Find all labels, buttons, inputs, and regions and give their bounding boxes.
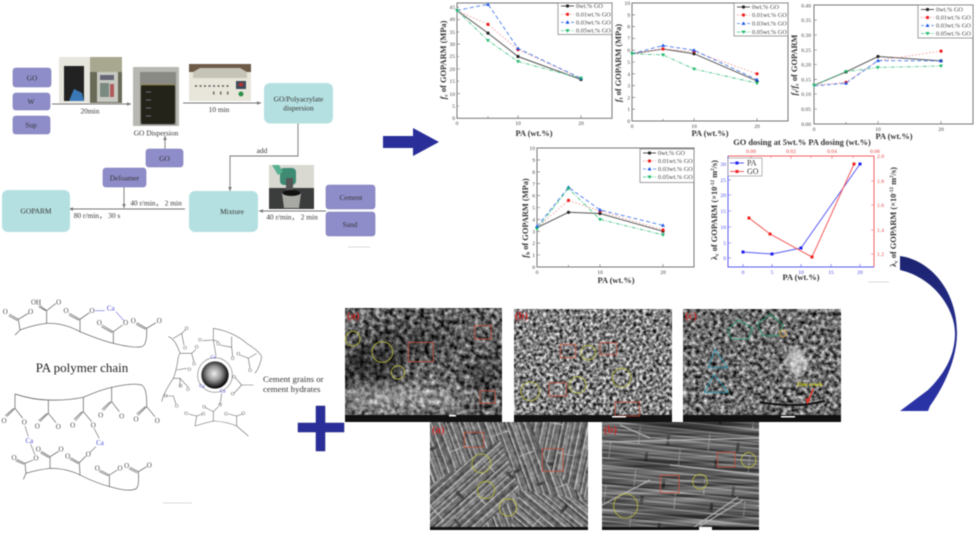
chart: flexural strength ft: 10 — [691, 124, 697, 130]
chart: chloride diffusion vs PA and GO: 0.04 — [827, 149, 837, 155]
box: Mixture — [189, 191, 258, 232]
bottom chains linked by Ca: O — [70, 421, 75, 429]
chart: compressive strength fc: 5 — [452, 104, 455, 110]
arrow: 10 min — [183, 103, 261, 114]
chart: strength ratio ft/fc: 0 — [813, 127, 816, 133]
diagram: polymer adsorbed on cement grain: O — [231, 393, 235, 398]
chart: bond strength fb: 5 — [532, 206, 535, 212]
chart: flexural strength ft — [614, 1, 788, 138]
chart: compressive strength fc — [439, 2, 612, 138]
chart: chloride diffusion vs PA and GO: 20 — [857, 270, 863, 276]
input box: Sand — [326, 212, 375, 236]
diagram: polymer adsorbed on cement grain: O — [179, 385, 183, 390]
chart: compressive strength fc: 30 — [449, 42, 455, 48]
chart: flexural strength ft: 20 — [754, 124, 760, 130]
chart: bond strength fb: 9 — [532, 158, 535, 164]
chart: compressive strength fc: 25 — [449, 54, 455, 60]
chart: chloride diffusion vs PA and GO: GO — [747, 167, 759, 176]
box: Defoamer with arrow — [103, 168, 146, 208]
chart: chloride diffusion vs PA and GO: 20 — [720, 193, 726, 199]
diagram: PA polymer chains: O — [56, 298, 61, 306]
diagram: polymer adsorbed on cement grain: Ca — [211, 356, 217, 361]
chart: flexural strength ft: 7 — [627, 36, 630, 42]
chart: compressive strength fc: 15 — [449, 79, 455, 85]
chart: bond strength fb: 2 — [532, 241, 535, 247]
bottom chains linked by Ca: O — [22, 419, 27, 427]
chart: chloride diffusion vs PA and GO: 10 — [720, 225, 726, 231]
chart: chloride diffusion vs PA and GO: of GOPARM (×10 — [710, 187, 719, 253]
chart: compressive strength fc: of GOPARM (MPa) — [439, 20, 448, 94]
arrow: mixture to GOPARM — [69, 198, 185, 220]
label: cement grains or cement hydrates: Cement grains or — [263, 374, 324, 384]
diagram: PA polymer chains: O — [89, 307, 95, 315]
chart: chloride diffusion vs PA and GO: 1.8 — [877, 179, 884, 185]
SEM image (a) top: (a) — [347, 311, 360, 322]
box: GO/Polyacrylate dispersion: GO/Polyacrylate — [274, 94, 324, 104]
chart: compressive strength fc: 20 — [578, 121, 584, 127]
chart: bond strength fb: 0 — [536, 270, 539, 276]
chart: chloride diffusion vs PA and GO: 10 — [798, 270, 804, 276]
bottom chains linked by Ca: O — [11, 454, 17, 462]
arrow: mixture to GOPARM: 40 r/min， 2 min — [130, 198, 182, 208]
chart: strength ratio ft/fc: 0.35 — [801, 18, 811, 24]
chart: bond strength fb: 0.03wt.% GO — [658, 166, 693, 173]
chart: bond strength fb: 0.05wt.% GO — [658, 174, 693, 181]
SEM image (c) top: Fine crack — [797, 382, 823, 388]
label: cement grains or cement hydrates — [263, 374, 324, 394]
arrow: 10 min: 10 min — [209, 105, 230, 114]
chart: compressive strength fc: 0.03wt.% GO — [576, 19, 611, 26]
input box: W: W — [28, 97, 35, 106]
chart: flexural strength ft: 3 — [627, 84, 630, 90]
diagram: PA polymer chains: O — [63, 307, 69, 315]
box: GOPARM: GOPARM — [21, 206, 52, 216]
SEM image (a) top — [330, 308, 502, 422]
diagram: polymer adsorbed on cement grain: O — [202, 405, 206, 410]
label: cement grains or cement hydrates: cement hydrates — [263, 384, 321, 394]
arrow: 40 r/min 2 min into mixture: 40 r/min， 2 min — [266, 212, 318, 222]
diagram: PA polymer chains: O — [157, 317, 162, 325]
chart: flexural strength ft: 0.01wt.% GO — [752, 12, 787, 19]
bottom chains linked by Ca: O — [35, 422, 40, 430]
arrow: mixture to GOPARM: 80 r/min， 30 s — [74, 211, 120, 220]
bottom chains linked by Ca: Ca — [25, 437, 33, 445]
chart: chloride diffusion vs PA and GO: 5 — [771, 270, 774, 276]
input box: Cement: Cement — [340, 193, 363, 202]
diagram: polymer adsorbed on cement grain: O — [218, 404, 222, 409]
chart: strength ratio ft/fc: 0.15 — [801, 78, 811, 84]
chart: chloride diffusion vs PA and GO: /s) — [889, 167, 898, 176]
chart: strength ratio ft/fc: f — [790, 84, 799, 88]
chart: chloride diffusion vs PA and GO: 0 — [742, 270, 745, 276]
chart: flexural strength ft: of GOPARM (MPa) — [614, 24, 623, 97]
chart: bond strength fb: 1 — [532, 253, 535, 259]
box: GO with arrow: GO — [159, 154, 170, 163]
arrow: add to mixture — [230, 124, 298, 191]
diagram: polymer adsorbed on cement grain: O — [224, 413, 228, 418]
input box: Sand: Sand — [343, 220, 358, 229]
chart: chloride diffusion vs PA and GO: PA (wt.%) — [782, 273, 820, 282]
diagram: polymer adsorbed on cement grain: O — [237, 353, 241, 358]
diagram: polymer adsorbed on cement grain: O — [183, 346, 187, 351]
diagram: polymer adsorbed on cement grain: Ca — [220, 389, 226, 394]
chart: flexural strength ft: t — [618, 97, 624, 99]
chart: flexural strength ft: 0.03wt.% GO — [752, 20, 787, 28]
input box: GO — [13, 68, 51, 87]
chart: chloride diffusion vs PA and GO: 0.06 — [870, 149, 880, 155]
diagram: polymer adsorbed on cement grain: O — [164, 395, 168, 400]
diagram: PA polymer chains: OH — [31, 299, 41, 307]
diagram: polymer adsorbed on cement grain — [162, 327, 262, 436]
chart: compressive strength fc: 0 — [452, 116, 455, 122]
chart: chloride diffusion vs PA and GO: λ — [710, 256, 719, 260]
chart: flexural strength ft: 5 — [627, 60, 630, 66]
chart: chloride diffusion vs PA and GO: -12 — [890, 186, 895, 194]
input box: Sup — [13, 116, 50, 134]
bottom chains linked by Ca: O — [119, 412, 124, 420]
arrow: 20min: 20min — [81, 106, 100, 116]
chart: chloride diffusion vs PA and GO: GO dosing at 5wt.% PA dosing (wt.%) — [733, 138, 871, 147]
bottom chains linked by Ca: O — [95, 465, 100, 473]
chart: strength ratio ft/fc: c — [794, 83, 800, 86]
chart: strength ratio ft/fc: 0.30 — [801, 33, 811, 39]
chart: compressive strength fc: 10 — [449, 92, 455, 98]
diagram: PA polymer chains: O — [97, 319, 102, 327]
diagram: polymer adsorbed on cement grain: O — [185, 327, 189, 332]
chart: chloride diffusion vs PA and GO: 0 — [723, 256, 726, 262]
chart: strength ratio ft/fc: / — [790, 88, 799, 92]
SEM image (a) bottom — [430, 422, 588, 530]
chart: chloride diffusion vs PA and GO: 0.02 — [786, 149, 796, 155]
diagram: polymer adsorbed on cement grain: O — [202, 413, 206, 418]
arrow: flow chart to charts — [383, 128, 439, 156]
chart: bond strength fb: 6 — [532, 194, 535, 200]
bottom chains linked by Ca: O — [1, 417, 7, 425]
chart: chloride diffusion vs PA and GO: 2 — [711, 168, 716, 171]
bottom chains linked by Ca: O — [133, 416, 139, 424]
diagram: polymer adsorbed on cement grain: O — [232, 375, 236, 380]
input box: W — [13, 93, 50, 110]
chart: compressive strength fc: 0.01wt.% GO — [576, 11, 611, 18]
diagram: polymer adsorbed on cement grain: O — [186, 388, 190, 393]
chart: strength ratio ft/fc: 0.00 — [801, 122, 811, 128]
chart: strength ratio ft/fc: 0.05 — [801, 107, 811, 113]
chart: chloride diffusion vs PA and GO: 0.00 — [746, 149, 756, 155]
bottom chains linked by Ca: O — [91, 421, 96, 429]
bottom chains linked by Ca: O — [58, 445, 64, 453]
chart: bond strength fb: 4 — [532, 218, 535, 224]
chart: strength ratio ft/fc: 0.03wt.% GO — [936, 22, 971, 30]
chart: chloride diffusion vs PA and GO: 5 — [723, 241, 726, 247]
diagram: polymer adsorbed on cement grain: O — [198, 339, 202, 344]
chart: flexural strength ft: 0wt.% GO — [752, 4, 779, 11]
SEM image (b) top: (b) — [515, 311, 528, 322]
chart: strength ratio ft/fc: 0.40 — [801, 4, 811, 10]
arrow: 40 r/min 2 min into mixture — [259, 211, 326, 222]
bottom chains linked by Ca: O — [36, 446, 41, 454]
chart: compressive strength fc: f — [439, 95, 448, 99]
chart: flexural strength ft: 10 — [624, 1, 630, 7]
bottom chains linked by Ca: O — [147, 461, 152, 469]
bottom chains linked by Ca: Ca — [96, 439, 104, 447]
chart: chloride diffusion vs PA and GO: PA — [747, 158, 757, 168]
chart: compressive strength fc: 0 — [456, 121, 459, 127]
chart: bond strength fb — [521, 146, 694, 285]
diagram: polymer adsorbed on cement grain: O — [184, 412, 188, 417]
chart: compressive strength fc: 45 — [449, 5, 455, 11]
chart: flexural strength ft: 9 — [627, 13, 630, 19]
chart: strength ratio ft/fc: 0.05wt.% GO — [936, 30, 971, 38]
diagram: PA polymer chains: Ca — [107, 305, 115, 313]
chart: chloride diffusion vs PA and GO: 2.0 — [877, 154, 884, 160]
diagram: PA polymer chains — [1, 298, 162, 490]
chart: bond strength fb: 7 — [532, 182, 535, 188]
chart: chloride diffusion vs PA and GO: 1.2 — [877, 252, 884, 258]
box: Defoamer with arrow: Defoamer — [110, 174, 140, 182]
chart: strength ratio ft/fc: 10 — [875, 127, 881, 133]
input box: GO: GO — [27, 74, 38, 82]
diagram: polymer adsorbed on cement grain: O — [192, 362, 196, 367]
diagram: polymer adsorbed on cement grain: O — [188, 368, 192, 373]
chart: bond strength fb: b — [526, 252, 532, 255]
bottom chains linked by Ca: O — [98, 411, 103, 419]
chart: flexural strength ft: f — [614, 98, 623, 102]
box: Mixture: Mixture — [220, 207, 245, 216]
chart: bond strength fb: f — [521, 254, 530, 258]
SEM image (b) bottom — [602, 422, 759, 530]
SEM image (b) top — [514, 309, 672, 422]
box: GOPARM — [2, 190, 70, 232]
chart: bond strength fb: 0wt.% GO — [658, 150, 685, 157]
chart: chloride diffusion vs PA and GO: λ — [889, 263, 898, 267]
chart: strength ratio ft/fc: 0.01wt.% GO — [936, 14, 971, 22]
chart: flexural strength ft: 0 — [627, 119, 630, 125]
chart: chloride diffusion vs PA and GO: 1.6 — [877, 203, 884, 209]
box: GO/Polyacrylate dispersion — [264, 83, 333, 124]
chart: chloride diffusion vs PA and GO — [710, 138, 900, 282]
chart: compressive strength fc: 40 — [449, 17, 455, 23]
chart: chloride diffusion vs PA and GO: 2 — [890, 175, 895, 178]
SEM image (b) bottom: (b) — [604, 425, 617, 436]
bottom chains linked by Ca: O — [155, 417, 160, 425]
icon: plus sign — [298, 406, 344, 451]
panel: preparation flow chart — [2, 57, 375, 236]
SEM image (a) bottom: (a) — [432, 425, 445, 436]
chart: flexural strength ft: 2 — [627, 96, 630, 102]
chart: chloride diffusion vs PA and GO: -12 — [711, 179, 716, 187]
chart: bond strength fb: 0 — [532, 265, 535, 271]
chart: compressive strength fc: 0.05wt.% GO — [576, 28, 611, 35]
chart: compressive strength fc: 0wt.% GO — [576, 3, 603, 10]
chart: chloride diffusion vs PA and GO: m — [889, 178, 898, 187]
photo: water bath — [189, 64, 251, 101]
chart: flexural strength ft: 0 — [631, 124, 634, 130]
box: GO with arrow — [146, 136, 183, 167]
chart: strength ratio ft/fc — [790, 4, 973, 141]
bottom chains linked by Ca: O — [117, 465, 123, 473]
label: PA polymer chain: PA polymer chain — [36, 360, 129, 375]
bottom chains linked by Ca: O — [33, 455, 39, 463]
diagram: PA polymer chains: O — [123, 319, 128, 327]
diagram: polymer adsorbed on cement grain: O — [248, 369, 252, 374]
chart: chloride diffusion vs PA and GO: of GOPARM (×10 — [889, 194, 898, 260]
diagram: polymer adsorbed on cement grain: O — [242, 412, 246, 417]
chart: bond strength fb: 8 — [532, 170, 535, 176]
chart: bond strength fb: 3 — [532, 230, 535, 236]
diagram: PA polymer chains: O — [131, 317, 136, 325]
chart: strength ratio ft/fc: 20 — [938, 127, 944, 133]
chart: flexural strength ft: 4 — [627, 72, 630, 78]
photo: mortar mixer — [269, 165, 314, 209]
chart: flexural strength ft: 0.05wt.% GO — [752, 29, 787, 36]
chart: flexural strength ft: 6 — [627, 48, 630, 54]
bottom chains linked by Ca: O — [124, 462, 129, 470]
diagram: polymer adsorbed on cement grain: O — [175, 405, 179, 410]
chart: strength ratio ft/fc: f — [790, 91, 799, 95]
chart: strength ratio ft/fc: 0wt.% GO — [936, 6, 963, 14]
chart: chloride diffusion vs PA and GO: c — [714, 253, 720, 256]
bottom chains linked by Ca: O — [65, 452, 70, 460]
chart: chloride diffusion vs PA and GO: 25 — [720, 178, 726, 184]
box: GO/Polyacrylate dispersion: dispersion — [283, 104, 314, 112]
chart: compressive strength fc: 35 — [449, 30, 455, 36]
chart: chloride diffusion vs PA and GO: 15 — [720, 209, 726, 215]
bottom chains linked by Ca: O — [56, 423, 61, 431]
chart: strength ratio ft/fc: 0.10 — [801, 92, 811, 98]
input box: Sup: Sup — [25, 120, 37, 130]
chart: chloride diffusion vs PA and GO: c — [894, 260, 900, 263]
diagram: polymer adsorbed on cement grain: O — [231, 357, 235, 362]
chart: bond strength fb: 10 — [597, 270, 603, 276]
chart: chloride diffusion vs PA and GO: 30 — [720, 162, 726, 168]
chart: chloride diffusion vs PA and GO: /s) — [710, 160, 719, 169]
chart: flexural strength ft: 8 — [627, 24, 630, 30]
diagram: polymer adsorbed on cement grain: O — [195, 346, 199, 351]
chart: strength ratio ft/fc: 0.20 — [801, 62, 811, 68]
label: GO Dispersion: GO Dispersion — [134, 128, 179, 138]
chart: flexural strength ft: 1 — [627, 107, 630, 113]
SEM image (c) top — [683, 309, 841, 422]
diagram: polymer adsorbed on cement grain: Ca — [199, 385, 206, 390]
diagram: polymer adsorbed on cement grain: O — [217, 343, 221, 348]
chart: compressive strength fc: c — [444, 94, 450, 97]
chart: compressive strength fc: PA (wt.%) — [515, 129, 553, 138]
top chain with Ca bridge — [9, 303, 156, 347]
chart: strength ratio ft/fc: of GOPARM — [790, 34, 799, 83]
bottom chains linked by Ca — [1, 384, 160, 490]
chart: flexural strength ft: PA (wt.%) — [691, 129, 729, 138]
chart: bond strength fb: of GOPARM (MPa) — [521, 178, 530, 252]
SEM image (c) top: (c) — [685, 311, 697, 322]
diagram: PA polymer chains: O — [28, 308, 33, 316]
chart: chloride diffusion vs PA and GO: 15 — [828, 270, 834, 276]
bottom chains linked by Ca: O — [86, 450, 91, 458]
diagram: PA polymer chains: O — [3, 308, 8, 316]
chart: compressive strength fc: 20 — [449, 67, 455, 73]
input box: Cement — [326, 185, 375, 209]
photo: beaker of GO dispersion — [133, 67, 179, 126]
chart: bond strength fb: 20 — [660, 270, 666, 276]
chart: strength ratio ft/fc: 0.25 — [801, 48, 811, 54]
arrow: 20min — [52, 104, 131, 116]
chart: chloride diffusion vs PA and GO: 1.4 — [877, 228, 884, 234]
photo: ultrasonic instrument — [59, 57, 122, 103]
chart: strength ratio ft/fc: t — [794, 91, 800, 93]
chart: bond strength fb: PA (wt.%) — [597, 276, 635, 285]
chart: strength ratio ft/fc: PA (wt.%) — [875, 132, 913, 141]
chart: bond strength fb: 10 — [529, 146, 535, 152]
arrow: add to mixture: add — [257, 146, 268, 155]
chart: bond strength fb: 0.01wt.% GO — [658, 158, 693, 165]
arrow: curved arrow from charts to SEM images — [900, 256, 957, 411]
chart: compressive strength fc: 10 — [515, 121, 521, 127]
chart: chloride diffusion vs PA and GO: m — [710, 171, 719, 180]
